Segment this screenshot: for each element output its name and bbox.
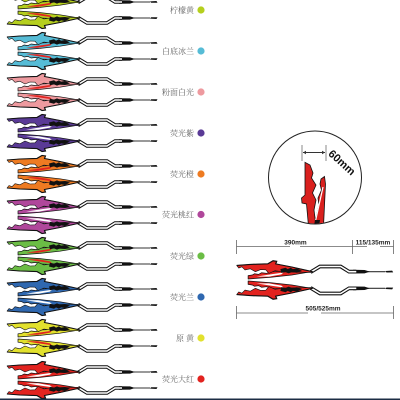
label: lemon yellow [170,5,205,15]
label: pink [162,87,205,97]
label: fluorescent orange: 荧光橙 [170,169,194,179]
clip pair: fluorescent blue [7,278,158,316]
label: original yellow: 原 黄 [176,333,195,343]
large red clip pair [237,261,393,299]
label: fluorescent green [170,251,205,261]
label: fluorescent blue: 荧光兰 [170,292,194,302]
dimension: 390mm / 115-135mm top: 390mm [284,240,307,246]
label: ice blue [162,46,205,56]
detail circle: 60mm jaw opening [268,131,362,226]
label: fluorescent red: 荧光大红 [162,374,194,384]
label: pink: 粉面白光 [162,87,194,97]
bottom edge bar [0,398,400,400]
clip pair: lemon yellow [7,0,158,28]
clip pair: fluorescent red [7,362,158,398]
label: fluorescent orange [170,169,205,179]
clip pair: fluorescent green [7,238,158,274]
label: fluorescent purple: 荧光紫 [170,128,194,138]
dimension: 390mm / 115-135mm top: 115/135mm [356,240,391,246]
label: fluorescent green: 荧光绿 [170,251,194,261]
clip pair: fluorescent purple [7,114,158,152]
label: fluorescent blue [170,292,205,302]
clip pair: white-base ice blue [7,32,158,70]
label: fluorescent red [162,374,205,384]
label: lemon yellow: 柠檬黄 [170,5,195,15]
detail circle: 60mm jaw opening: 60mm [326,148,357,178]
label: ice blue: 白底冰兰 [162,46,194,56]
label: fluorescent purple [170,128,205,138]
clip pair: fluorescent orange [7,156,158,192]
clip pair: original yellow [7,320,158,356]
label: fluorescent peach [162,209,205,219]
clip pair: fluorescent peach [7,196,158,234]
label: original yellow [176,333,205,343]
dimension: 505/525mm bottom [236,306,394,319]
dimension: 505/525mm bottom: 505/525mm [305,306,341,312]
label: fluorescent peach: 荧光桃红 [162,209,194,219]
clip pair: pink [7,74,158,110]
dimension: 390mm / 115-135mm top [236,240,394,254]
